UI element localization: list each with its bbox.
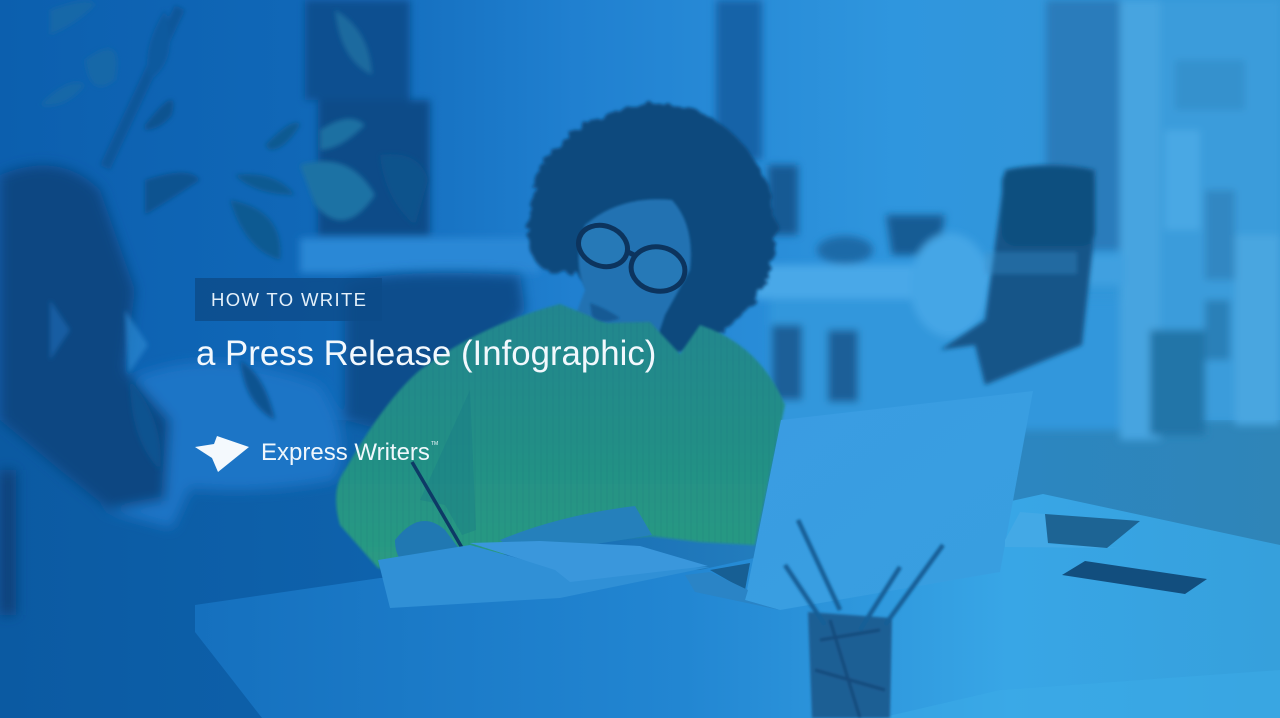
plant leaves	[40, 1, 428, 470]
heading label: HOW TO WRITE	[211, 289, 367, 310]
desk	[195, 494, 1280, 718]
notebook	[378, 541, 750, 608]
woman: hair	[336, 104, 785, 575]
icon: Express Writers logo mark	[195, 436, 249, 472]
plant shadows and pot	[0, 165, 525, 615]
woman: glasses	[573, 219, 688, 295]
woman: mouth	[590, 303, 620, 322]
brand name: Express Writers	[261, 439, 430, 466]
woman: face and neck	[572, 199, 691, 345]
office chair	[940, 165, 1095, 385]
laptop	[685, 391, 1033, 610]
windows and columns	[300, 0, 1280, 440]
main title: a Press Release (Infographic)	[196, 334, 656, 373]
woman: sweater	[336, 304, 785, 575]
woman: hands and pen	[395, 521, 475, 575]
heading tag background	[195, 278, 382, 321]
tablet and phone	[1005, 512, 1207, 594]
pen holder	[785, 520, 943, 718]
brand name: TM	[431, 441, 438, 447]
